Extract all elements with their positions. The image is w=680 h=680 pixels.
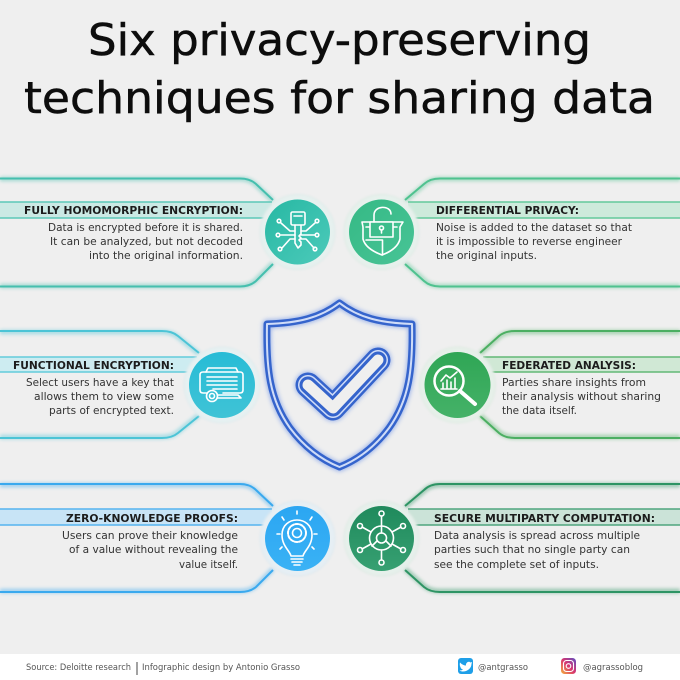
panel: functional encryption xyxy=(0,331,260,438)
icon: light bulb with gear xyxy=(260,501,335,576)
panel: differential privacy xyxy=(344,178,680,286)
panel frame xyxy=(0,484,273,592)
instagram handle: @agrassoblog xyxy=(583,663,643,673)
source credit: Infographic design by Antonio Grasso xyxy=(142,663,300,673)
check mark xyxy=(308,360,378,408)
shield outline xyxy=(267,303,412,467)
heading: ZERO-KNOWLEDGE PROOFS: xyxy=(66,512,238,525)
description: value itself. xyxy=(179,558,238,571)
panel frame xyxy=(405,484,680,592)
icon: circuit key xyxy=(260,194,335,270)
description: parts of encrypted text. xyxy=(49,404,174,417)
panel: federated analysis xyxy=(420,331,680,438)
description xyxy=(502,376,661,417)
footer xyxy=(0,654,680,680)
description: Users can prove their knowledge xyxy=(62,529,238,542)
heading: FULLY HOMOMORPHIC ENCRYPTION: xyxy=(24,204,243,217)
description xyxy=(436,221,633,262)
description: It can be analyzed, but not decoded xyxy=(50,235,243,248)
heading: FUNCTIONAL ENCRYPTION: xyxy=(13,359,174,372)
icon: magnifying glass with chart xyxy=(420,347,496,423)
description: the original inputs. xyxy=(436,249,537,262)
description xyxy=(434,529,640,571)
title xyxy=(24,15,655,124)
icon: central shield with check mark xyxy=(267,303,412,467)
panel frame xyxy=(0,178,273,286)
title: Six privacy-preserving xyxy=(88,15,591,66)
icon: network hub xyxy=(344,501,419,576)
description: Select users have a key that xyxy=(26,376,175,389)
description xyxy=(48,221,243,262)
description: see the complete set of inputs. xyxy=(434,558,599,571)
icon: twitter xyxy=(458,658,473,674)
heading band xyxy=(0,509,272,525)
source credit: Source: Deloitte research xyxy=(26,663,131,673)
heading band xyxy=(0,202,272,218)
panel frame xyxy=(405,178,680,286)
twitter handle: @antgrasso xyxy=(478,663,528,673)
icon: key and encrypted document xyxy=(184,347,260,423)
description: the data itself. xyxy=(502,404,577,417)
icon: instagram xyxy=(561,658,576,674)
heading band xyxy=(483,357,680,372)
icon: shield lock xyxy=(344,194,419,270)
heading: FEDERATED ANALYSIS: xyxy=(502,359,636,372)
heading: DIFFERENTIAL PRIVACY: xyxy=(436,204,579,217)
description: allows them to view some xyxy=(34,390,174,403)
heading band xyxy=(0,357,197,372)
title: techniques for sharing data xyxy=(24,73,655,124)
heading: SECURE MULTIPARTY COMPUTATION: xyxy=(434,512,655,525)
panel: fully homomorphic encryption xyxy=(0,178,335,286)
heading band xyxy=(408,202,680,218)
heading band xyxy=(408,509,680,525)
description: it is impossible to reverse engineer xyxy=(436,235,622,248)
description: Data is encrypted before it is shared. xyxy=(48,221,243,234)
panel frame xyxy=(480,331,680,438)
description: Parties share insights from xyxy=(502,376,646,389)
description: their analysis without sharing xyxy=(502,390,661,403)
description: Noise is added to the dataset so that xyxy=(436,221,633,234)
description: Data analysis is spread across multiple xyxy=(434,529,640,542)
panel: zero-knowledge proofs xyxy=(0,484,335,592)
description xyxy=(62,529,238,571)
panel frame xyxy=(0,331,199,438)
description: parties such that no single party can xyxy=(434,543,630,556)
description: of a value without revealing the xyxy=(69,543,238,556)
description xyxy=(26,376,175,417)
panel: secure multiparty computation xyxy=(344,484,680,592)
description: into the original information. xyxy=(89,249,243,262)
source credit xyxy=(26,662,300,675)
